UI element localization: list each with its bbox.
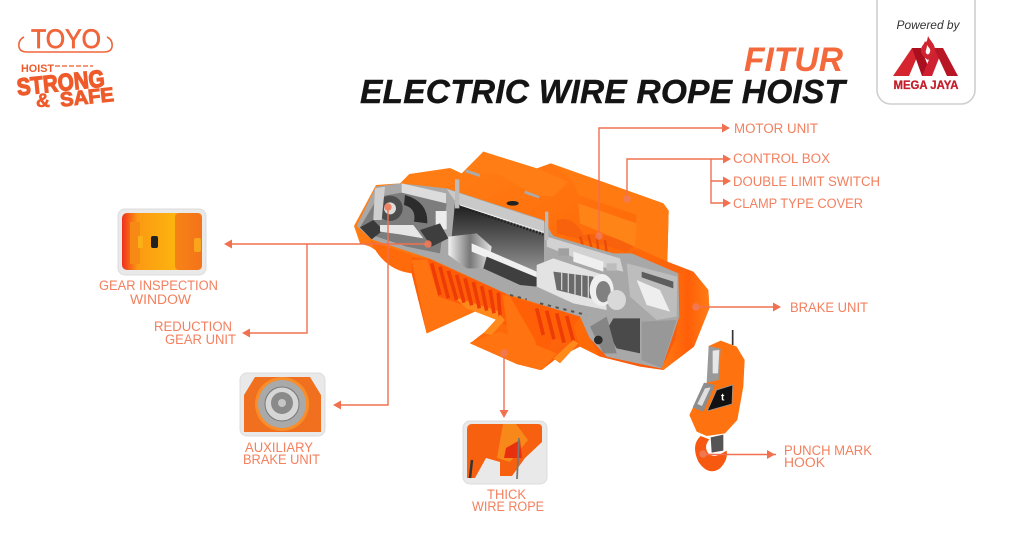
thumbnail photo: inspection window (122, 213, 202, 270)
hook capacity letter: t (721, 392, 725, 403)
label: punch mark hook (784, 443, 872, 470)
badge wordmark: MEGA JAYA (894, 80, 958, 92)
title line: Fitur: FITUR (744, 41, 843, 79)
brake cover end cap (662, 272, 709, 370)
thumbnail frame (240, 373, 325, 436)
icon: Mega Jaya M and flame (893, 36, 958, 76)
label: auxiliary brake unit: AUXILIARY (245, 440, 313, 455)
hook curve (695, 436, 727, 471)
badge card (877, 0, 975, 104)
label: thick wire rope: WIRE ROPE (472, 499, 544, 514)
hook capacity plate (707, 385, 733, 411)
label: gear inspection window: GEAR INSPECTION (99, 278, 218, 293)
motor rotor (537, 258, 607, 310)
logo: Toyo Hoist Strong & Safe (16, 24, 115, 112)
shaft and rollers (448, 233, 492, 268)
panel: gear inspection window (99, 209, 218, 307)
label: motor unit: MOTOR UNIT (734, 121, 818, 136)
motor housing shading (551, 163, 669, 262)
hook cable (730, 330, 735, 345)
wire rope drum (450, 203, 544, 283)
illustration: cutaway electric wire rope hoist (354, 152, 709, 370)
callout anchor dots (384, 195, 707, 458)
logo tagline: HOIST (21, 63, 54, 75)
badge: Powered by Mega Jaya (877, 0, 975, 104)
label: reduction gear unit: REDUCTION (154, 319, 232, 334)
label: gear inspection window (99, 278, 218, 307)
lower ribbed casing (371, 242, 508, 333)
label: gear inspection window: WINDOW (130, 292, 191, 307)
cut-away interior (357, 183, 679, 369)
title line: Electric Wire Rope Hoist: ELECTRIC WIRE ROPE HOIST (360, 74, 848, 111)
gear train (360, 190, 447, 253)
hoist outer housing (354, 152, 709, 370)
panel: auxiliary brake unit (240, 373, 325, 467)
label: double limit switch: DOUBLE LIMIT SWITCH (733, 174, 880, 189)
brake and electrics (627, 263, 677, 320)
label: clamp type cover: CLAMP TYPE COVER (733, 196, 863, 211)
badge caption: Powered by (896, 18, 960, 32)
callout arrowheads (224, 124, 781, 459)
label: punch mark hook: PUNCH MARK (784, 443, 872, 458)
feet (470, 332, 557, 370)
logo tagline: & (36, 91, 50, 112)
cover plates (455, 179, 548, 240)
thumbnail frame (118, 209, 206, 275)
panel: thick wire rope (463, 421, 547, 514)
logo tagline: SAFE (59, 84, 115, 112)
cooling ribs (432, 263, 575, 346)
thumbnail frame (463, 421, 547, 484)
thumbnail photo: brake disc (244, 377, 321, 432)
label: punch mark hook: HOOK (784, 455, 825, 470)
hook rear plate (707, 346, 721, 383)
title (360, 41, 848, 111)
label: auxiliary brake unit (243, 440, 320, 467)
label: reduction gear unit (154, 319, 236, 347)
logo wordmark: TOYO: TOYO (31, 24, 101, 54)
logo tagline: STRONG (16, 65, 106, 101)
logo underline bracket (19, 37, 112, 52)
label: auxiliary brake unit: BRAKE UNIT (243, 452, 320, 467)
label: reduction gear unit: GEAR UNIT (165, 332, 236, 347)
callout lines (230, 128, 776, 454)
label: brake unit: BRAKE UNIT (790, 300, 868, 315)
hook block (689, 330, 745, 471)
hook stem (711, 435, 723, 453)
hook block body (689, 341, 745, 436)
label group: right side features (733, 121, 880, 470)
thumbnail photo: wire rope (467, 424, 542, 479)
label: thick wire rope (472, 487, 544, 514)
label: control box: CONTROL BOX (733, 151, 830, 166)
label: thick wire rope: THICK (487, 487, 526, 502)
